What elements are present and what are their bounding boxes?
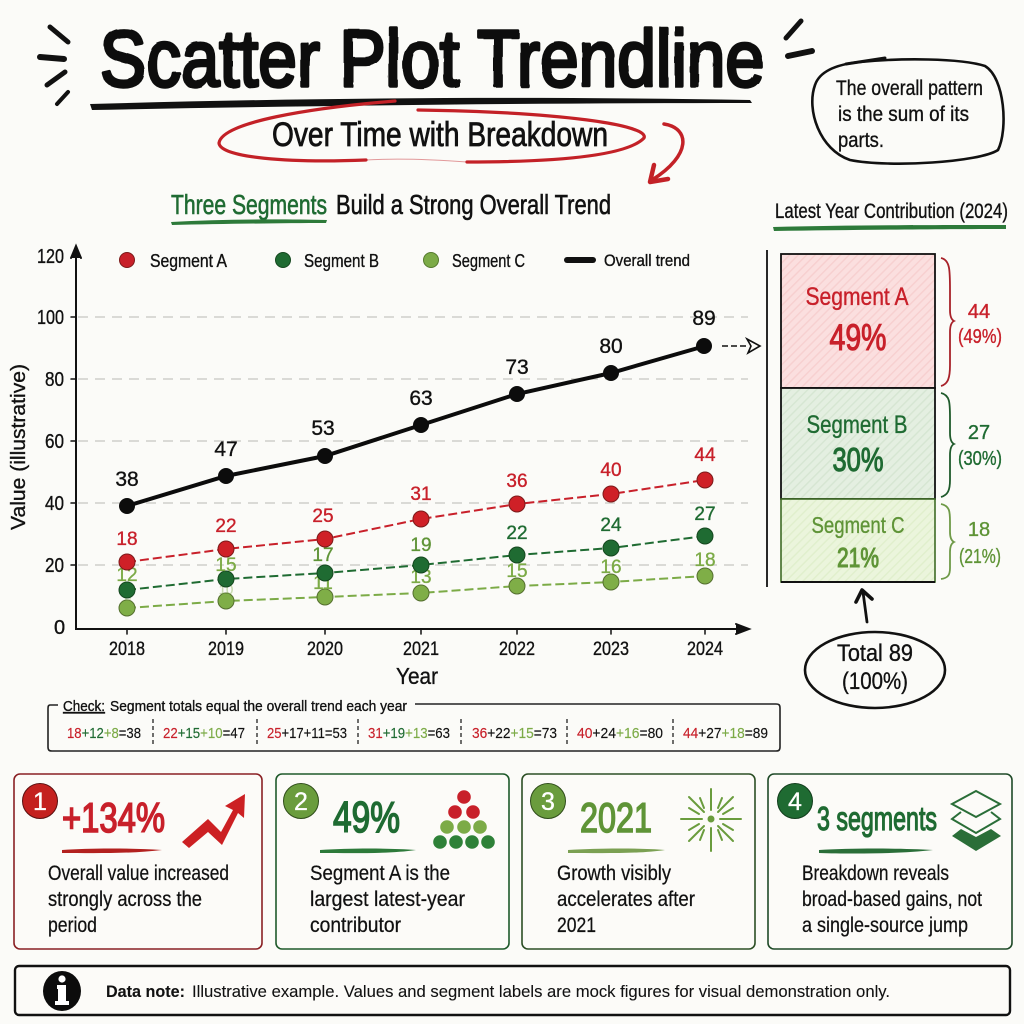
card 2 text: largest latest-year bbox=[310, 888, 465, 911]
stack: segment A: 49% bbox=[830, 317, 886, 358]
series: segment A: 22 bbox=[215, 516, 237, 537]
stat +134%: +134% bbox=[62, 794, 165, 841]
badge 1: 1 bbox=[33, 788, 47, 816]
series: segment B: 12 bbox=[116, 565, 138, 586]
series: segment B bbox=[116, 504, 716, 598]
series: segment A: 25 bbox=[312, 506, 334, 527]
x axis year labels: 2020 bbox=[307, 639, 343, 660]
legend: Segment A bbox=[150, 251, 227, 271]
check equations: 40+24+16=80 bbox=[577, 725, 663, 742]
stat 2021: 2021 bbox=[580, 794, 652, 841]
subtitle: Over Time with Breakdown bbox=[272, 116, 608, 154]
series: segment C: 13 bbox=[410, 567, 432, 588]
series: overall trend: 38 bbox=[115, 468, 139, 491]
check equations: 18+12+8=38 bbox=[67, 725, 141, 742]
icon: starburst bbox=[681, 789, 741, 851]
series: overall trend: 73 bbox=[505, 356, 529, 379]
card 2 text: contributor bbox=[310, 914, 401, 937]
card 1 text: period bbox=[48, 914, 97, 937]
badge 2 bbox=[284, 784, 318, 818]
card 4 text: Breakdown reveals bbox=[802, 862, 949, 885]
brace: segment C: (21%) bbox=[959, 546, 1001, 568]
data note text: Data note: bbox=[106, 982, 185, 1001]
callout: overall pattern: is the sum of its bbox=[838, 103, 969, 126]
stat 49%: 49% bbox=[333, 793, 400, 842]
total bubble: (100%) bbox=[842, 668, 908, 695]
brace: segment C bbox=[941, 504, 1001, 579]
icon: dot pyramid bbox=[433, 790, 495, 849]
total bubble: Total 89 bbox=[837, 640, 913, 667]
total bubble bbox=[805, 632, 945, 708]
chart heading: Build a Strong Overall Trend bbox=[336, 189, 611, 220]
check equations: 31+19+13=63 bbox=[368, 725, 450, 742]
series: segment C: 16 bbox=[600, 557, 622, 578]
legend: Segment C bbox=[452, 251, 525, 271]
x axis year labels: 2022 bbox=[499, 639, 535, 660]
y axis tick labels: 20 bbox=[45, 555, 64, 577]
legend bbox=[120, 251, 690, 271]
x axis year labels: 2024 bbox=[687, 639, 723, 660]
stack: segment A: Segment A bbox=[806, 283, 909, 311]
check panel bbox=[48, 698, 780, 751]
series: segment C: 18 bbox=[694, 550, 716, 571]
brace: segment A: 44 bbox=[968, 301, 990, 323]
card 3 text: 2021 bbox=[557, 914, 596, 937]
x axis year labels: 2021 bbox=[403, 639, 439, 660]
arrow to stack bbox=[856, 590, 872, 622]
stack: segment A bbox=[781, 254, 935, 388]
card 1 text: strongly across the bbox=[48, 888, 202, 911]
x axis title: Year bbox=[396, 663, 438, 689]
series: segment A: 31 bbox=[410, 484, 432, 505]
legend: Segment B bbox=[304, 251, 379, 271]
badge 3: 3 bbox=[541, 788, 555, 816]
series: segment B: 19 bbox=[410, 535, 432, 556]
card 4 text bbox=[802, 862, 982, 937]
series: segment C: 8 bbox=[125, 592, 131, 604]
stack: segment B bbox=[781, 388, 935, 499]
series: segment A: 44 bbox=[694, 445, 716, 466]
y axis tick labels bbox=[37, 246, 65, 639]
title: Scatter Plot Trendline bbox=[100, 14, 764, 103]
data note panel bbox=[15, 966, 1010, 1015]
check equations: 25+17+11=53 bbox=[267, 725, 347, 742]
y axis tick labels: 60 bbox=[45, 431, 64, 453]
series: segment A: 40 bbox=[600, 460, 622, 481]
brace: segment B bbox=[941, 393, 1002, 497]
icon: layers bbox=[952, 791, 1001, 851]
y axis tick labels: 100 bbox=[37, 307, 64, 329]
series: overall trend: 63 bbox=[409, 387, 433, 410]
chart heading: Three Segments bbox=[171, 189, 327, 220]
legend: Overall trend bbox=[604, 251, 690, 270]
stacked contribution bar bbox=[767, 250, 1002, 587]
check heading: Segment totals equal the overall trend each year bbox=[110, 698, 407, 715]
check equations: 36+22+15=73 bbox=[472, 725, 557, 742]
x axis year labels bbox=[109, 639, 723, 660]
series: segment B: 24 bbox=[600, 515, 622, 536]
card 3 bbox=[522, 774, 755, 949]
badge 4 bbox=[778, 784, 812, 818]
scatter line chart bbox=[8, 246, 749, 689]
card 2 bbox=[276, 774, 509, 949]
card 4 bbox=[768, 774, 1012, 949]
red curved arrow bbox=[650, 124, 683, 182]
brace: segment B: 27 bbox=[968, 422, 990, 444]
y axis tick labels: 120 bbox=[37, 246, 64, 268]
stack: segment B: Segment B bbox=[806, 411, 908, 439]
series: segment B: 15 bbox=[215, 555, 237, 576]
card 3 text: accelerates after bbox=[557, 888, 695, 911]
callout: overall pattern: parts. bbox=[838, 129, 884, 152]
series: segment B: 17 bbox=[312, 545, 334, 566]
series: segment C: 15 bbox=[506, 561, 528, 582]
series: overall trend bbox=[115, 307, 716, 514]
brace: segment C: 18 bbox=[968, 519, 990, 541]
callout: overall pattern bbox=[812, 58, 1004, 164]
stack: segment C: Segment C bbox=[812, 512, 904, 538]
series: segment A bbox=[116, 445, 716, 570]
series: segment C: 10 bbox=[219, 582, 233, 597]
brace: segment A bbox=[941, 258, 1002, 386]
series: overall trend: 53 bbox=[311, 417, 335, 440]
check equations: 44+27+18=89 bbox=[683, 725, 768, 742]
series: segment C: 11 bbox=[313, 573, 333, 594]
card 4 text: broad-based gains, not bbox=[802, 888, 982, 911]
callout: overall pattern: The overall pattern bbox=[836, 77, 983, 100]
axes bbox=[71, 246, 749, 634]
card 4 text: a single-source jump bbox=[802, 914, 968, 937]
icon: rising arrow bbox=[182, 794, 245, 848]
y axis tick labels: 80 bbox=[45, 369, 64, 391]
series: overall trend: 89 bbox=[692, 307, 716, 330]
card 2 text: Segment A is the bbox=[310, 862, 450, 885]
brace: segment B: (30%) bbox=[958, 448, 1002, 470]
y axis title: Value (illustrative) bbox=[8, 364, 30, 530]
y axis tick labels: 0 bbox=[54, 617, 65, 639]
card 1 text: Overall value increased bbox=[48, 862, 229, 885]
series: segment B: 27 bbox=[694, 504, 716, 525]
x axis year labels: 2019 bbox=[208, 639, 244, 660]
badge 3 bbox=[530, 784, 566, 818]
badge 2: 2 bbox=[294, 788, 308, 816]
stack: segment B: 30% bbox=[832, 441, 884, 478]
series: segment A: 18 bbox=[116, 529, 138, 550]
chart heading bbox=[171, 189, 611, 225]
dashed connector arrow bbox=[722, 339, 760, 353]
brace: segment A: (49%) bbox=[958, 326, 1002, 348]
stat 3 segments: 3 segments bbox=[817, 800, 937, 837]
y axis tick labels: 40 bbox=[45, 493, 64, 515]
subtitle ellipse bbox=[219, 101, 644, 162]
badge 4: 4 bbox=[788, 788, 802, 816]
series: segment B: 22 bbox=[506, 523, 528, 544]
x axis year labels: 2018 bbox=[109, 639, 145, 660]
card 1 text bbox=[48, 862, 229, 937]
gridlines bbox=[78, 317, 748, 565]
stack: segment C: 21% bbox=[837, 542, 879, 573]
check heading: Check: bbox=[63, 698, 105, 715]
check equations: 22+15+10=47 bbox=[163, 725, 245, 742]
x axis year labels: 2023 bbox=[593, 639, 629, 660]
data note text: Illustrative example. Values and segment labels are mock figures for visual demonstration only. bbox=[192, 982, 890, 1001]
series: overall trend: 47 bbox=[214, 438, 238, 461]
title underline brush bbox=[90, 98, 752, 110]
series: overall trend: 80 bbox=[599, 335, 623, 358]
icon: info bbox=[43, 971, 81, 1011]
check equations bbox=[67, 719, 768, 747]
title accent strokes bbox=[40, 21, 812, 104]
series: segment A: 36 bbox=[506, 471, 528, 492]
card 1 bbox=[14, 774, 262, 949]
stack: segment C bbox=[781, 499, 935, 582]
card 3 text bbox=[557, 862, 695, 937]
badge 1 bbox=[22, 784, 58, 818]
series: segment C bbox=[119, 550, 716, 616]
card 2 text bbox=[310, 862, 465, 937]
card 3 text: Growth visibly bbox=[557, 862, 671, 885]
